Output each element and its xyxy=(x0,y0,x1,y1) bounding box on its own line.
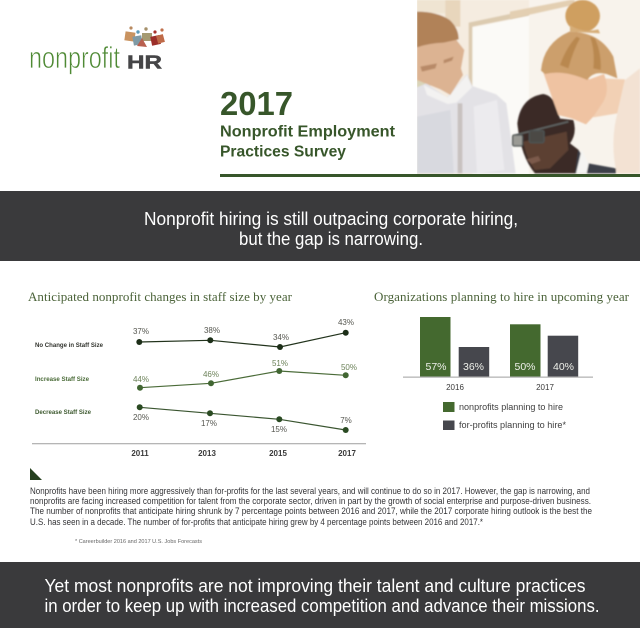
panel: line chart staff size: 2015 xyxy=(269,449,287,458)
banner text: Yet most nonprofits are not improving their talent and culture practices xyxy=(44,576,586,596)
x-axis years: 2011 xyxy=(131,449,149,458)
bars 2016 xyxy=(420,317,489,377)
legend: for-profits planning to hire* xyxy=(459,420,566,430)
row labels: No Change in Staff Size xyxy=(35,342,103,349)
icon: group of people xyxy=(124,26,165,47)
series: decrease: 15% xyxy=(271,425,287,434)
row labels: Increase Staff Size xyxy=(35,376,89,383)
bars 2016: 57% xyxy=(425,361,447,373)
chart heading: Organizations planning to hire in upcoming year xyxy=(374,289,630,304)
title block xyxy=(220,85,396,160)
logo HR: HR xyxy=(127,52,162,72)
series: increase: 46% xyxy=(203,370,219,379)
series: increase: 50% xyxy=(341,363,357,372)
legend: nonprofits planning to hire xyxy=(459,402,563,412)
panel: line chart staff size: 2017 xyxy=(338,449,356,458)
legend xyxy=(443,402,566,430)
axis xyxy=(32,443,366,444)
body text: U.S. has seen in a decade. The number of for-profits that anticipate hiring grew by 4 percentage points between 2016 and 2017.* xyxy=(30,517,483,527)
right woman neck xyxy=(593,78,625,117)
series: increase: 51% xyxy=(272,359,288,368)
chart heading: Anticipated nonprofit changes in staff size by year xyxy=(28,289,293,304)
left woman hair xyxy=(417,12,459,47)
banner text: Nonprofit hiring is still outpacing corporate hiring, xyxy=(144,209,518,229)
series: decrease xyxy=(133,404,352,434)
row labels: Decrease Staff Size xyxy=(35,409,91,416)
bars 2017: 40% xyxy=(553,361,574,373)
banner: hiring gap xyxy=(0,191,640,261)
panel: bar chart hiring plans: 2017 xyxy=(536,383,554,392)
series: no change: 38% xyxy=(204,326,220,335)
series: no change: 43% xyxy=(338,318,354,327)
right woman face xyxy=(543,70,607,124)
footnote: * Careerbuilder 2016 and 2017 U.S. Jobs Forecasts xyxy=(75,539,202,545)
series: decrease: 7% xyxy=(340,416,352,425)
row labels xyxy=(35,342,103,416)
panel: line chart staff size: 2013 xyxy=(198,449,216,458)
survey name line 1: Nonprofit Employment xyxy=(220,124,396,140)
left woman face xyxy=(417,37,464,95)
right woman blouse xyxy=(613,68,640,173)
banner: talent and culture: in order to keep up with increased competition and advance their missions. xyxy=(44,596,600,616)
panel: bar chart hiring plans xyxy=(374,289,630,430)
year heading: 2017 xyxy=(220,85,293,122)
survey name line 2: Practices Survey xyxy=(220,144,346,160)
icon: corner triangle xyxy=(30,468,42,480)
series: decrease: 17% xyxy=(201,419,217,428)
series: increase xyxy=(133,359,357,391)
year labels: 2016 xyxy=(446,383,464,392)
panel: line chart staff size xyxy=(28,289,366,458)
left woman shirt xyxy=(417,74,516,173)
body text: nonprofits are facing increased competition for talent from the corporate sector, driven in part by the growth of social enterprise and purpose-driven business. xyxy=(30,496,591,506)
body text xyxy=(30,486,592,527)
banner: talent and culture xyxy=(0,562,640,628)
logo: nonprofit HR xyxy=(29,26,165,75)
series: no change: 34% xyxy=(273,333,289,342)
man glasses xyxy=(513,122,568,136)
bars 2017 xyxy=(510,324,578,377)
banner: hiring gap: but the gap is narrowing. xyxy=(239,229,423,249)
logo wordmark: nonprofit xyxy=(29,40,120,75)
series: decrease: 20% xyxy=(133,413,149,422)
bars 2017: 50% xyxy=(514,361,536,373)
right woman hair xyxy=(541,32,617,80)
photo: three colleagues looking at a screen xyxy=(417,0,640,177)
bars 2016: 36% xyxy=(463,361,484,373)
man jacket and shirt xyxy=(575,150,616,173)
series: no change xyxy=(133,318,354,350)
photo rule xyxy=(220,174,640,177)
man xyxy=(517,94,579,173)
body text: The number of nonprofits that anticipate hiring shrunk by 7 percentage points between 2016 and 2017, while the 2017 corporate hiring outlook is the best the xyxy=(30,506,592,516)
series: no change: 37% xyxy=(133,327,149,336)
axis xyxy=(403,376,593,378)
series: increase: 44% xyxy=(133,375,149,384)
